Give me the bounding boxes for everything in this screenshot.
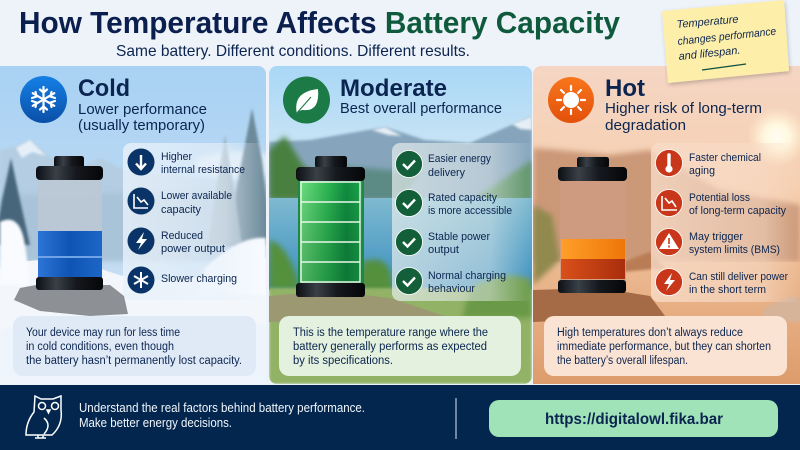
footer message: Make better energy decisions.: [79, 416, 232, 430]
effect: easier delivery: delivery: [428, 167, 465, 179]
cold note: Your device may run for less time: [26, 327, 180, 339]
effect: reduced power: power output: [161, 243, 225, 255]
effect: reduced power: Reduced: [161, 230, 203, 242]
cold heading: Cold: [78, 75, 130, 102]
effect: normal charging: Normal charging: [428, 270, 506, 282]
sticky note: [662, 0, 789, 83]
cold subheading: Lower performance: [78, 102, 207, 118]
effect: capacity loss: of long-term capacity: [689, 205, 786, 217]
effect: capacity loss: [656, 190, 786, 217]
effect: system limits: system limits (BMS): [689, 244, 780, 256]
effect: chemical aging: [656, 150, 761, 177]
moderate subheading: Best overall performance: [340, 101, 502, 117]
footer message: [79, 401, 365, 430]
effect: short-term power: Can still deliver power: [689, 271, 788, 283]
effect: normal charging: behaviour: [428, 283, 475, 295]
title: How Temperature Affects Battery Capacity: [19, 5, 621, 40]
moderate note: by its specifications.: [293, 355, 393, 367]
effect: system limits: May trigger: [689, 231, 743, 243]
hot note: the battery’s overall lifespan.: [557, 355, 688, 367]
panel: cold: [0, 66, 285, 384]
effect: stable power: Stable power: [428, 231, 490, 243]
effect: rated capacity: [396, 190, 512, 217]
effect: short-term power: in the short term: [689, 284, 766, 296]
url button: [489, 400, 778, 437]
hot effects list: [651, 143, 800, 302]
effect: lower capacity: Lower available: [161, 190, 232, 202]
hot note: High temperatures don’t always reduce: [557, 327, 743, 339]
effect: easier delivery: [396, 150, 491, 179]
sticky note: and lifespan.: [678, 45, 741, 63]
effect: higher resistance: internal resistance: [161, 164, 245, 176]
subtitle: Same battery. Different conditions. Different results.: [116, 43, 470, 60]
cold subheading: [78, 102, 207, 134]
moderate note: This is the temperature range where the: [293, 327, 488, 339]
icon: owl: [26, 396, 61, 438]
effect: stable power: [396, 228, 490, 256]
effect: short-term power: [656, 268, 788, 296]
hot heading: Hot: [605, 75, 645, 102]
panel: moderate: [269, 66, 532, 384]
effect: chemical aging: aging: [689, 165, 715, 177]
effect: normal charging: [396, 268, 506, 295]
footer bar: [0, 385, 800, 450]
panel: hot: [533, 66, 800, 384]
sticky note: changes performance: [677, 26, 777, 48]
effect: system limits: [656, 228, 780, 256]
moderate effects list: [392, 143, 532, 301]
footer message: Understand the real factors behind battery performance.: [79, 401, 365, 415]
effect: higher resistance: [128, 148, 245, 176]
effect: higher resistance: Higher: [161, 151, 192, 163]
cold effects list: [123, 143, 266, 300]
battery: moderate, full charge: [296, 156, 365, 297]
moderate note: battery generally performs as expected: [293, 341, 487, 353]
effect: slower charging: Slower charging: [161, 273, 237, 285]
hot desert scene: [533, 66, 800, 384]
effect: easier delivery: Easier energy: [428, 153, 491, 165]
hot note: [544, 316, 787, 376]
battery: cold, low charge: [36, 156, 103, 290]
moderate lake scene: [269, 66, 532, 384]
cold note: in cold conditions, even though: [26, 341, 174, 353]
cold icon: snowflake: [20, 76, 67, 123]
hot subheading: Higher risk of long-term: [605, 101, 762, 117]
battery: hot, low charge: [558, 157, 627, 293]
hot subheading: [605, 101, 762, 134]
cold subheading: (usually temporary): [78, 118, 205, 134]
cold winter scene: [0, 66, 266, 316]
moderate note: [279, 316, 521, 376]
effect: rated capacity: Rated capacity: [428, 192, 497, 204]
effect: rated capacity: is more accessible: [428, 205, 512, 217]
effect: reduced power: [128, 228, 225, 255]
moderate heading: Moderate: [340, 75, 447, 102]
url button: https://digitalowl.fika.bar: [545, 411, 723, 428]
effect: capacity loss: Potential loss: [689, 192, 750, 204]
cold note: the battery hasn’t permanently lost capacity.: [26, 355, 242, 367]
hot note: immediate performance, but they can shorten: [557, 341, 771, 353]
moderate icon: leaf: [283, 76, 330, 124]
effect: lower capacity: [128, 188, 232, 216]
effect: slower charging: [128, 266, 237, 294]
cold note: [13, 316, 256, 376]
effect: stable power: output: [428, 244, 459, 256]
hot subheading: degradation: [605, 118, 686, 134]
effect: chemical aging: Faster chemical: [689, 152, 761, 164]
effect: lower capacity: capacity: [161, 204, 201, 216]
sticky note: Temperature: [676, 14, 739, 31]
hot icon: sun: [548, 77, 594, 123]
